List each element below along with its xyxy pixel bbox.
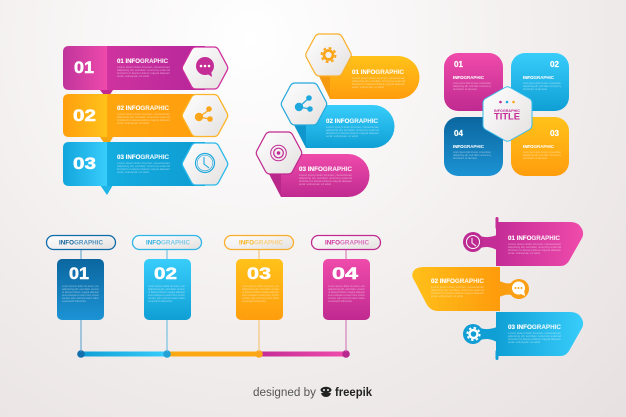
tile 02: adipiscing elit, sed diam nonummy [523,84,562,88]
timeline step 03: ut laoreet dolore magna aliquam [242,290,279,294]
tile 01: INFOGRAPHIC [453,75,485,80]
tab 02: adipiscing elit, sed diam nonummy euismod [431,288,485,292]
icon: clock [196,154,214,172]
timeline step 02: veniam quis nostrud exerci tation [148,296,186,300]
banner 01: Lorem ipsum dolor sit amet, consectetuer [117,65,170,69]
timeline step 02 [132,236,202,352]
step 03: adipiscing elit, sed diam nonummy euismod [299,176,353,180]
timeline step 01: INFOGRAPHIC [59,240,104,246]
step 01: adipiscing elit, sed diam nonummy euismod [352,79,406,83]
tab 02: Lorem ipsum dolor sit amet, consectetuer [431,285,484,289]
timeline step 01 [46,236,116,352]
timeline step 04: suscipit lobortis [328,299,353,303]
tile 04: 04 [454,129,464,138]
centre hexagon title: TITLE [494,112,520,122]
banner 02: Lorem ipsum dolor sit amet, consectetuer [117,112,170,116]
step 02: Lorem ipsum dolor sit amet, consectetuer [326,125,379,129]
step 02 [281,83,394,148]
tab 02: 02 INFOGRAPHIC [431,278,484,285]
centre hexagon title: INFOGRAPHIC [494,109,520,113]
tile 02: INFOGRAPHIC [523,75,555,80]
panel: numbered banners [63,46,228,195]
banner 02: erat volutpat ut wisi [117,121,150,125]
banner 03: Lorem ipsum dolor sit amet, consectetuer [117,161,170,165]
footer credit: freepik [335,387,373,399]
step 03: erat volutpat ut wisi [299,182,332,186]
step 03 [256,132,369,197]
timeline step 04: 04 [332,264,359,283]
timeline step 01: adipiscing elit, sed diam nonum [62,287,99,291]
tile 02: tincidunt ut laoreet [523,87,547,91]
panel: alternating tabs [412,217,583,360]
panel: hexagon staircase [256,34,419,197]
timeline step 03: INFOGRAPHIC [239,240,284,246]
step 03: Lorem ipsum dolor sit amet, consectetuer [299,173,352,177]
step 02: erat volutpat ut wisi [326,134,359,138]
step 02: tincidunt ut laoreet dolore magna aliquam [326,131,379,135]
tile 03 [511,117,569,176]
tile 04: INFOGRAPHIC [453,144,485,149]
tile 02 [511,53,569,111]
icon: share [195,106,213,122]
tab 03: 03 INFOGRAPHIC [508,324,561,331]
icon: target [271,145,286,161]
step 02: 02 INFOGRAPHIC [326,118,378,125]
tab 01: tincidunt ut laoreet dolore magna aliquam [508,248,561,252]
step 03: 03 INFOGRAPHIC [299,166,352,173]
tab 01: erat volutpat ut wisi [508,251,541,255]
step 01: 01 INFOGRAPHIC [352,69,404,76]
banner 02: 02 INFOGRAPHIC [117,105,169,112]
banner 03: tincidunt ut laoreet dolore magna aliquam [117,167,170,171]
banner 02 [63,94,228,147]
timeline step 04 [312,236,380,352]
timeline step 03: 03 [247,264,271,283]
timeline step 03: Lorem ipsum dolor sit amet, con [242,284,280,288]
footer credit [253,387,373,399]
timeline step 04: erat volutpat ut wisi enim minim [328,293,365,297]
timeline step 01: ut laoreet dolore magna aliquam [62,290,99,294]
tab 03: Lorem ipsum dolor sit amet, consectetuer [508,331,561,335]
timeline step 02: suscipit lobortis [148,299,173,303]
tab 01: Lorem ipsum dolor sit amet, consectetuer [508,242,561,246]
timeline step 01: suscipit lobortis [62,299,87,303]
banner 03: erat volutpat ut wisi [117,170,150,174]
tab 02: erat volutpat ut wisi [431,294,464,298]
tile 01: 01 [454,60,464,69]
banner 03: 03 INFOGRAPHIC [117,154,169,161]
icon: freepik logo [320,387,332,397]
tile 03: tincidunt ut laoreet [523,156,547,160]
tile 04: tincidunt ut laoreet [453,156,477,160]
timeline step 03: adipiscing elit, sed diam nonum [242,287,279,291]
step 01 [306,34,419,99]
tile 03: adipiscing elit, sed diam nonummy [523,153,562,157]
tile 03: INFOGRAPHIC [523,144,555,149]
banner 01 [63,46,228,99]
tab 03: tincidunt ut laoreet dolore magna aliquam [508,337,561,341]
timeline step 02: Lorem ipsum dolor sit amet, con [148,284,186,288]
tab 03: erat volutpat ut wisi [508,340,541,344]
tab 02 [412,267,529,311]
timeline step 04: adipiscing elit, sed diam nonum [328,287,365,291]
tab 01: 01 INFOGRAPHIC [508,235,560,242]
tile 03: Lorem ipsum dolor sit amet, consectetuer [523,150,561,154]
icon: speech bubble [512,282,525,296]
timeline step 01: 01 [69,264,89,283]
banner 02: tincidunt ut laoreet dolore magna aliquam [117,118,170,122]
banner 03: adipiscing elit, sed diam nonummy euismod [117,164,171,168]
timeline step 04: veniam quis nostrud exerci tation [328,296,366,300]
step 03: tincidunt ut laoreet dolore magna aliquam [299,179,352,183]
icon: speech bubble [196,57,214,77]
tile 04: adipiscing elit, sed diam nonummy [453,153,492,157]
tile 03: 03 [550,129,560,138]
tile 01: Lorem ipsum dolor sit amet, consectetuer [453,81,491,85]
tile 01: adipiscing elit, sed diam nonummy [453,84,492,88]
timeline step 02: ut laoreet dolore magna aliquam [148,290,185,294]
tab 01: adipiscing elit, sed diam nonummy euismod [508,245,562,249]
centre hexagon title [483,87,532,141]
timeline step 01: erat volutpat ut wisi enim minim [62,293,99,297]
timeline step 01: veniam quis nostrud exerci tation [62,296,100,300]
tab 03: adipiscing elit, sed diam nonummy euismod [508,334,562,338]
timeline step 02: INFOGRAPHIC [146,240,191,246]
banner 03: 03 [73,154,96,173]
icon: gear [467,328,480,340]
banner 01: 01 INFOGRAPHIC [117,58,168,65]
step 01: Lorem ipsum dolor sit amet, consectetuer [352,76,405,80]
banner 03 [63,142,228,195]
timeline step 03: suscipit lobortis [242,299,267,303]
footer credit: designed by [253,387,316,399]
timeline step 03: veniam quis nostrud exerci tation [242,296,280,300]
tile 02: 02 [550,60,560,69]
step 01: tincidunt ut laoreet dolore magna aliquam [352,82,405,86]
timeline step 03: erat volutpat ut wisi enim minim [242,293,279,297]
tile 04 [444,117,503,176]
timeline step 02: erat volutpat ut wisi enim minim [148,293,185,297]
step 02: adipiscing elit, sed diam nonummy euismod [326,128,380,132]
banner 01: tincidunt ut laoreet dolore magna aliquam [117,71,170,75]
timeline step 04: Lorem ipsum dolor sit amet, con [328,284,366,288]
banner 02: adipiscing elit, sed diam nonummy euismod [117,115,171,119]
panel: four tile title [444,53,569,176]
icon: gear [322,48,336,62]
timeline step 02: 02 [154,264,177,283]
panel: timeline [46,236,380,358]
icon: share [295,95,313,112]
tile 01 [444,53,503,111]
banner 01: adipiscing elit, sed diam nonummy euismod [117,68,171,72]
timeline bar [77,350,350,358]
tile 01: tincidunt ut laoreet [453,87,477,91]
step 01: erat volutpat ut wisi [352,85,385,89]
timeline step 02: adipiscing elit, sed diam nonum [148,287,185,291]
timeline step 04: INFOGRAPHIC [325,240,370,246]
banner 01: 01 [74,58,94,77]
banner 01: erat volutpat ut wisi [117,74,150,78]
icon: clock [466,236,480,248]
banner 02: 02 [73,106,96,125]
timeline step 01: Lorem ipsum dolor sit amet, con [62,284,100,288]
tab 01 [463,217,583,266]
timeline step 04: ut laoreet dolore magna aliquam [328,290,365,294]
timeline step 03 [224,236,294,352]
tile 04: Lorem ipsum dolor sit amet, consectetuer [453,150,491,154]
tab 02: tincidunt ut laoreet dolore magna aliquam [431,291,484,295]
tab 03 [463,312,583,360]
tile 02: Lorem ipsum dolor sit amet, consectetuer [523,81,561,85]
